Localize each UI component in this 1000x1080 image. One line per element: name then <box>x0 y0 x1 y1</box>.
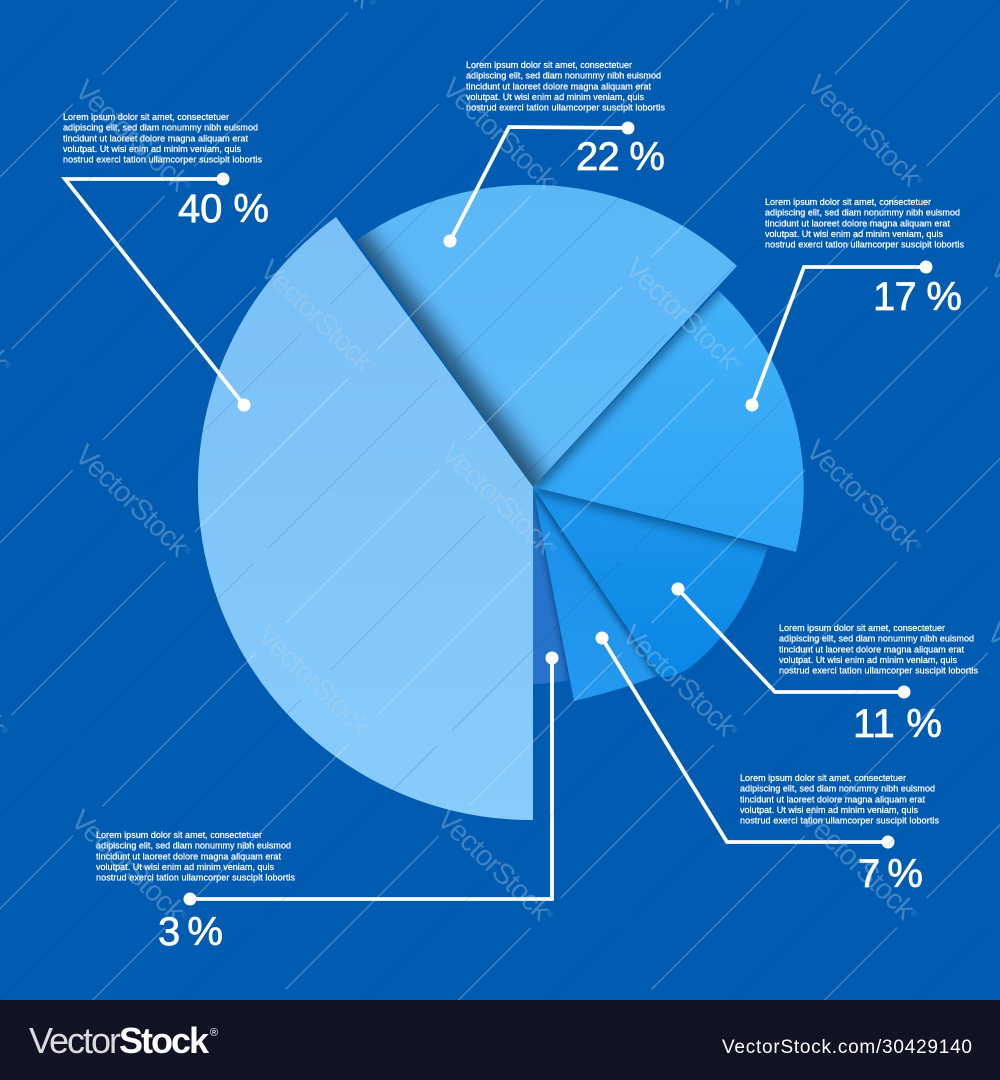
watermark text: ® <box>913 540 924 551</box>
watermark text: VectorStock <box>68 439 195 563</box>
description text: nostrud exerci tation ullamcorper suscipit lobortis <box>96 873 296 883</box>
shadow on 7 percent slice <box>534 488 659 678</box>
value: 40 % <box>178 187 269 231</box>
watermark text: ® <box>2 360 13 371</box>
watermark text: ® <box>549 178 560 189</box>
watermark text: VectorStock <box>253 254 380 378</box>
description text: nostrud exerci tation ullamcorper suscipit lobortis <box>779 666 978 676</box>
description text: Lorem ipsum dolor sit amet, consectetuer <box>63 112 229 122</box>
watermark text: ® <box>544 909 555 920</box>
watermark text: VectorStock <box>434 437 561 561</box>
description text: volutpat. Ut wisi enim ad minim veniam, quis <box>96 862 274 872</box>
callout: 3 percent <box>96 652 558 954</box>
dot <box>920 260 932 274</box>
dot <box>882 836 894 848</box>
shadow on 17 percent slice <box>534 290 725 490</box>
dot <box>184 892 196 906</box>
dot <box>546 652 558 664</box>
footer logo: VectorStock <box>29 1020 210 1061</box>
leader line <box>450 127 628 241</box>
watermark text: ® <box>729 725 740 736</box>
watermark text: ® <box>367 360 378 371</box>
description text: volutpat. Ut wisi enim ad minim veniam, quis <box>466 92 644 102</box>
watermark text: ® <box>548 543 559 554</box>
watermark text: ® <box>182 545 193 556</box>
shadow on 3 percent slice <box>533 490 569 680</box>
description text: tincidunt ut laoreet dolore magna aliquam erat <box>740 794 925 804</box>
description text: tincidunt ut laoreet dolore magna aliquam erat <box>466 81 651 91</box>
description text: volutpat. Ut wisi enim ad minim veniam, quis <box>63 144 242 154</box>
description text: adipiscing elit, sed diam nonummy nibh euismod <box>466 71 661 81</box>
description text: adipiscing elit, sed diam nonummy nibh euismod <box>740 784 935 794</box>
watermark text: VectorStock <box>800 69 927 193</box>
description text: volutpat. Ut wisi enim ad minim veniam, quis <box>740 805 918 815</box>
watermark text: ® <box>364 725 375 736</box>
leader line <box>602 638 888 842</box>
value: 22 % <box>576 135 665 179</box>
description text <box>765 197 964 250</box>
watermark text: VectorStock <box>64 804 191 928</box>
callout: 7 percent <box>596 632 940 896</box>
pie chart <box>198 185 804 820</box>
leader line <box>190 658 552 899</box>
watermark text: VectorStock <box>430 803 557 927</box>
footer image id: VectorStock.com/30429140 <box>722 1037 972 1058</box>
dot <box>596 632 608 644</box>
description text: adipiscing elit, sed diam nonummy nibh euismod <box>63 123 258 133</box>
description text: volutpat. Ut wisi enim ad minim veniam, quis <box>779 655 958 665</box>
value: 3 % <box>158 910 223 954</box>
watermark text: ® <box>908 908 919 919</box>
description text: nostrud exerci tation ullamcorper suscipit lobortis <box>466 103 666 113</box>
watermark text: VectorStock <box>799 434 926 558</box>
callout: 40 percent <box>63 112 269 412</box>
description text: tincidunt ut laoreet dolore magna aliquam erat <box>63 133 248 143</box>
slice: 7 percent <box>533 487 660 701</box>
description text: volutpat. Ut wisi enim ad minim veniam, quis <box>765 229 944 239</box>
callout: 17 percent <box>746 197 964 412</box>
description text: tincidunt ut laoreet dolore magna aliquam erat <box>779 644 964 654</box>
value: 11 % <box>853 702 942 746</box>
description text <box>63 112 262 165</box>
callout: 11 percent <box>672 582 978 746</box>
dot <box>622 122 634 134</box>
description text <box>740 773 940 826</box>
dot <box>216 172 230 186</box>
description text: adipiscing elit, sed diam nonummy nibh euismod <box>779 634 974 644</box>
footer background <box>0 1000 1000 1080</box>
dot <box>238 398 250 412</box>
watermark text: VectorStock <box>68 74 195 198</box>
description text: tincidunt ut laoreet dolore magna aliquam erat <box>765 218 950 228</box>
description text: nostrud exerci tation ullamcorper suscipit lobortis <box>765 240 964 250</box>
value: 7 % <box>858 852 923 896</box>
callout: 22 percent <box>444 60 666 248</box>
description text: Lorem ipsum dolor sit amet, consectetuer <box>96 830 262 840</box>
footer bar <box>0 1000 1000 1080</box>
description text: nostrud exerci tation ullamcorper suscipit lobortis <box>740 816 940 826</box>
description text: Lorem ipsum dolor sit amet, consectetuer <box>740 773 906 783</box>
description text: adipiscing elit, sed diam nonummy nibh euismod <box>765 208 960 218</box>
dot <box>898 686 910 698</box>
watermark text: VectorStock <box>250 619 377 743</box>
description text: Lorem ipsum dolor sit amet, consectetuer <box>765 197 931 207</box>
description text <box>96 830 296 883</box>
watermark text: VectorStock <box>794 802 921 926</box>
leader line <box>65 179 244 405</box>
slice: 22 percent <box>357 185 737 487</box>
dot <box>672 582 684 596</box>
slice: 17 percent <box>533 290 804 552</box>
leader line <box>678 589 904 692</box>
registered mark: ® <box>210 1027 218 1039</box>
dot <box>746 398 758 412</box>
description text: Lorem ipsum dolor sit amet, consectetuer <box>466 60 632 70</box>
shadow on 22 percent slice <box>357 226 554 487</box>
watermark text: ® <box>914 175 925 186</box>
watermark text: VectorStock <box>615 619 742 743</box>
watermark text: ® <box>182 180 193 191</box>
description text: tincidunt ut laoreet dolore magna aliquam erat <box>96 851 281 861</box>
slice: 3 percent <box>533 487 569 684</box>
value: 17 % <box>873 275 962 319</box>
watermark text: ® <box>732 358 743 369</box>
watermark text: VectorStock <box>618 252 745 376</box>
watermark text: ® <box>178 910 189 921</box>
description text <box>466 60 666 113</box>
description text: Lorem ipsum dolor sit amet, consectetuer <box>779 623 945 633</box>
description text: adipiscing elit, sed diam nonummy nibh euismod <box>96 841 291 851</box>
leader line <box>752 267 926 405</box>
watermark text: VectorStock <box>435 72 562 196</box>
slice: 40 percent <box>198 217 533 820</box>
description text: nostrud exerci tation ullamcorper suscipit lobortis <box>63 155 262 165</box>
dot <box>444 234 456 248</box>
description text <box>779 623 978 676</box>
shadow on 11 percent slice <box>534 488 768 556</box>
slice: 11 percent <box>533 487 768 677</box>
